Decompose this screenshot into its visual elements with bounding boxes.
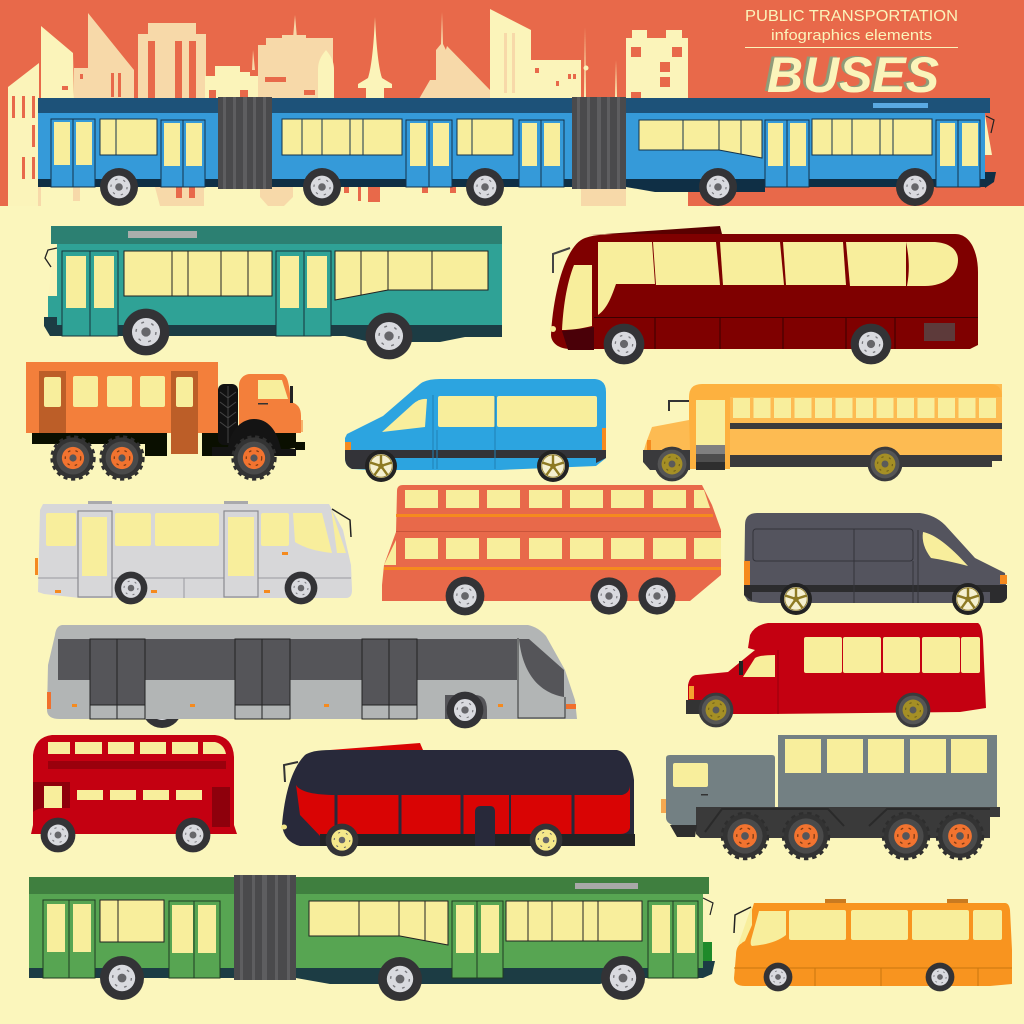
windows [124, 251, 488, 300]
title block [745, 8, 958, 103]
upper windows [405, 490, 710, 508]
wheels [123, 309, 412, 359]
van: dark grey [744, 513, 1007, 615]
doors [90, 639, 417, 719]
vehicle: grey 8x8 truck bus [661, 735, 1000, 859]
doors [62, 251, 331, 336]
header panel [0, 0, 1024, 206]
city skyline [8, 9, 688, 206]
subtitle line 2: infographics elements [771, 27, 932, 44]
heading: buses: BUSES [764, 46, 936, 102]
doors [78, 511, 258, 597]
wheels [365, 450, 569, 482]
windows [743, 637, 980, 677]
wheels [446, 577, 676, 615]
windows [785, 739, 987, 773]
wheels [41, 818, 210, 852]
lower windows [405, 538, 721, 559]
windows [733, 398, 996, 418]
doors [43, 900, 698, 978]
wheels [100, 168, 934, 206]
accordion joint [234, 875, 296, 980]
bus: green articulated [29, 875, 715, 1001]
doors [51, 119, 980, 187]
wheels [699, 693, 930, 727]
wheel [447, 692, 483, 728]
bus: orange coach [734, 899, 1012, 991]
wheels [764, 963, 954, 991]
windows [100, 900, 642, 945]
wheels [115, 572, 317, 604]
bus: maroon coach [550, 226, 978, 364]
windows [48, 742, 226, 800]
wheels [655, 447, 902, 481]
heading: buses: BUSES [767, 47, 939, 103]
bus: black and red coach [281, 743, 635, 856]
bus: silver coach [35, 501, 352, 604]
van: blue minibus [345, 379, 606, 482]
front of blue bus [985, 115, 996, 188]
windows [100, 119, 932, 158]
wheels [722, 813, 983, 859]
bus: grey airport bus [47, 625, 577, 728]
wheels [52, 437, 275, 479]
wheels [780, 583, 984, 615]
wheels [604, 324, 891, 364]
bus: yellow school bus [643, 384, 1002, 481]
subtitle line 1: PUBLIC TRANSPORTATION [745, 8, 958, 25]
bus: coral double-decker [382, 485, 721, 615]
bus: red double-decker [31, 735, 237, 852]
bus: red shuttle [686, 623, 986, 727]
front of green bus [703, 898, 715, 978]
bus: teal city bus [44, 226, 502, 359]
windows [562, 242, 958, 330]
wheels [100, 956, 645, 1001]
bus: blue articulated [38, 97, 996, 206]
vehicle: orange off-road truck bus [26, 362, 305, 479]
wheels [326, 824, 562, 856]
accordion joints [218, 97, 626, 189]
